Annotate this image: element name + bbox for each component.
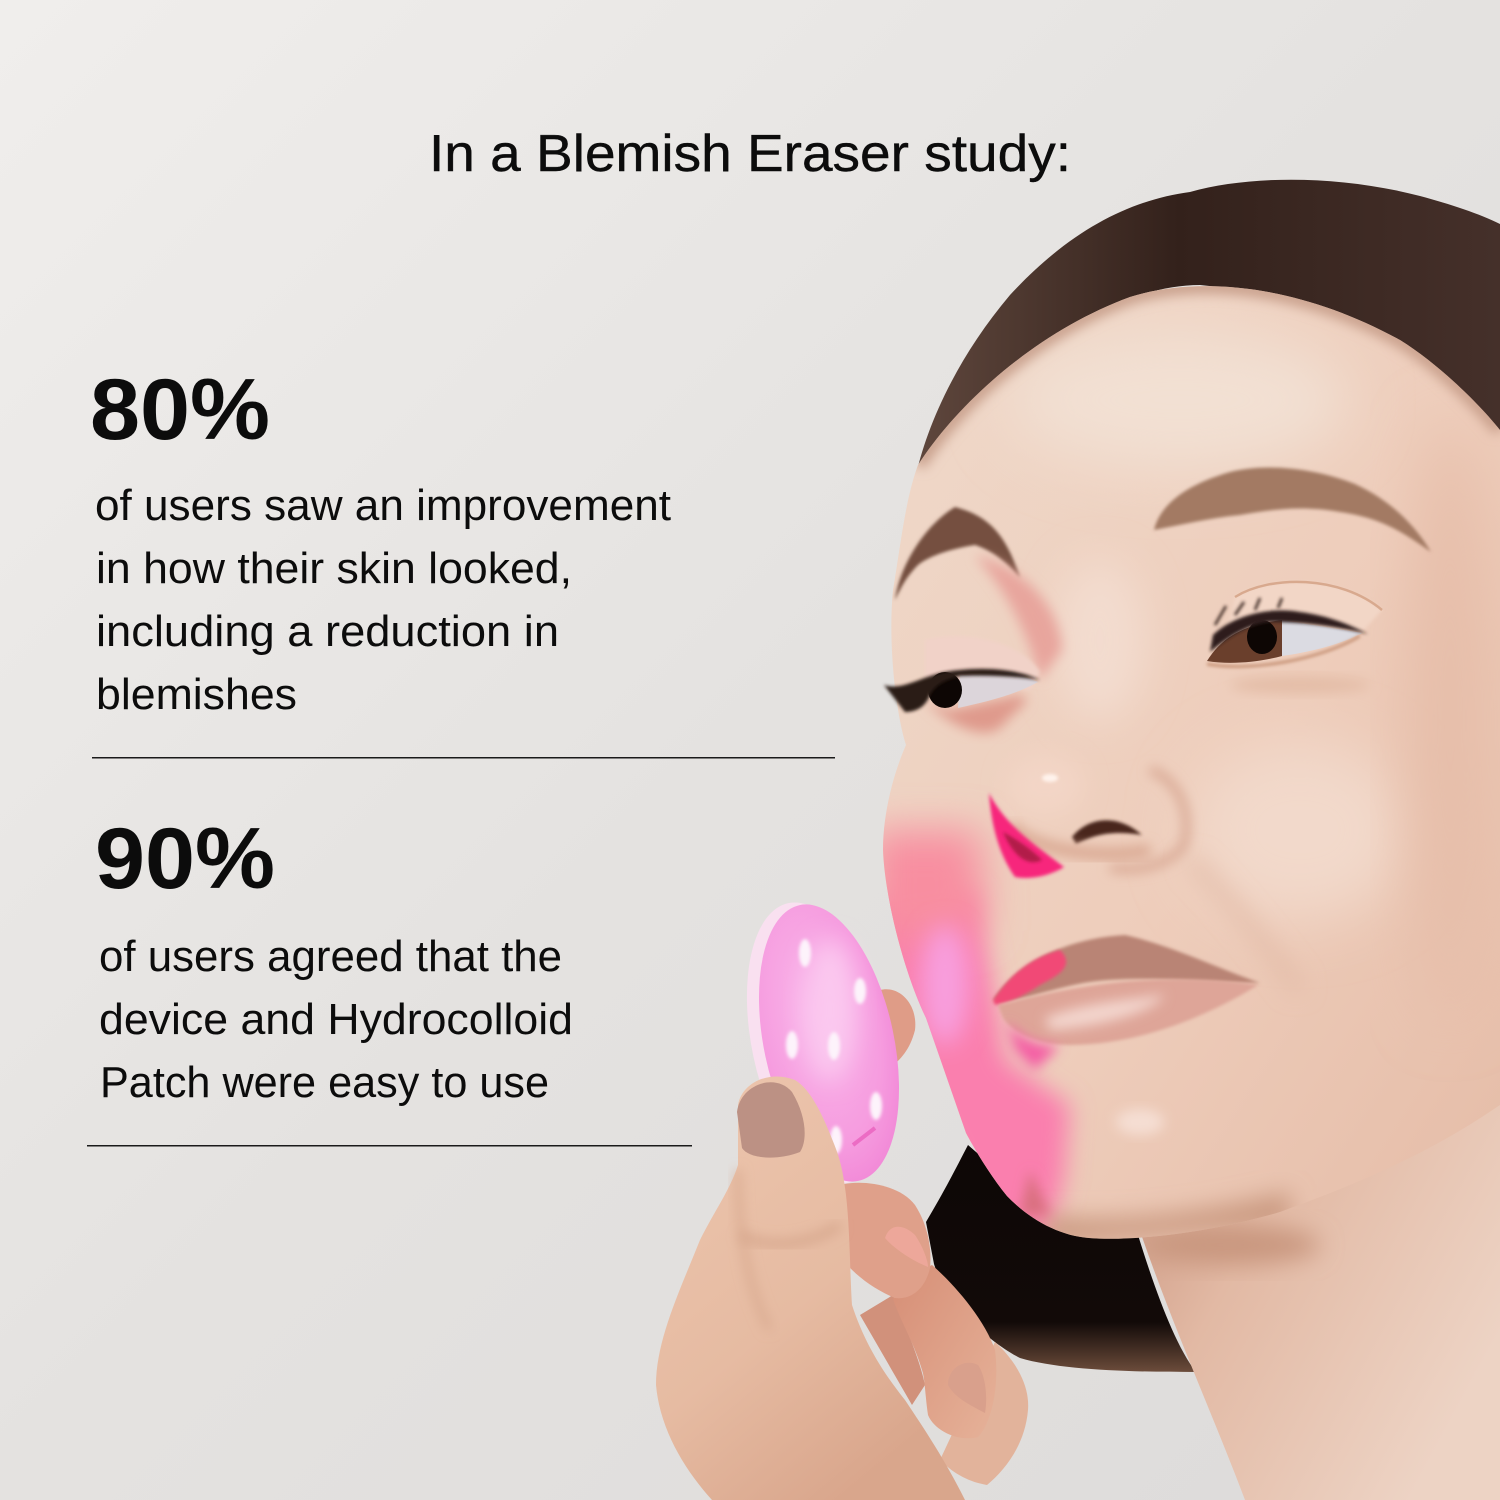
finger behind device [880, 989, 915, 1068]
right eye [1207, 582, 1382, 694]
portrait illustration [656, 180, 1500, 1500]
hairline shadow [918, 286, 1500, 465]
face skin [883, 286, 1500, 1239]
device rim [724, 889, 912, 1197]
ring finger shadow [860, 1295, 925, 1405]
stat description 90% [99, 932, 573, 1107]
lips [993, 935, 1260, 1070]
stat: 90% [95, 811, 573, 1107]
nose [989, 755, 1186, 878]
upper hair [915, 180, 1500, 480]
stat description 90%: device and Hydrocolloid [99, 995, 573, 1044]
pink glow on cheek and jaw [888, 891, 1082, 1231]
stat description 80%: in how their skin looked, [96, 544, 572, 593]
stat number 90%: 90% [95, 811, 275, 907]
stat description 90%: Patch were easy to use [100, 1058, 549, 1107]
stat description 80%: of users saw an improvement [95, 481, 671, 530]
thumb nail [737, 1082, 805, 1158]
stat: 80% [90, 362, 671, 719]
device: glowing pink disc [724, 889, 922, 1197]
face shading and red light glow [860, 286, 1500, 1260]
stat description 80% [95, 481, 671, 719]
title: In a Blemish Eraser study: [429, 125, 1071, 183]
jaw shadow [1040, 1192, 1290, 1245]
neck [1130, 1090, 1500, 1500]
nose shadow fold [1196, 865, 1262, 938]
index nail [885, 1227, 928, 1267]
palm and thumb [656, 1076, 965, 1500]
stat description 80%: including a reduction in [96, 607, 559, 656]
left eyebrow [895, 507, 1020, 600]
stat description 80%: blemishes [96, 670, 297, 719]
middle nail [948, 1363, 986, 1413]
lower hair [926, 1145, 1196, 1372]
index finger [844, 1183, 930, 1298]
middle finger [893, 1265, 996, 1438]
stat description 90%: of users agreed that the [99, 932, 562, 981]
device LED dots [786, 939, 882, 1154]
device face [736, 892, 922, 1194]
chin highlight [1116, 1109, 1164, 1135]
left eye [884, 555, 1062, 733]
thumb creases [740, 1225, 840, 1244]
back finger [940, 1342, 1028, 1485]
hand [656, 1076, 1028, 1500]
right eyebrow [1154, 468, 1431, 552]
stat number 80%: 80% [90, 362, 270, 458]
